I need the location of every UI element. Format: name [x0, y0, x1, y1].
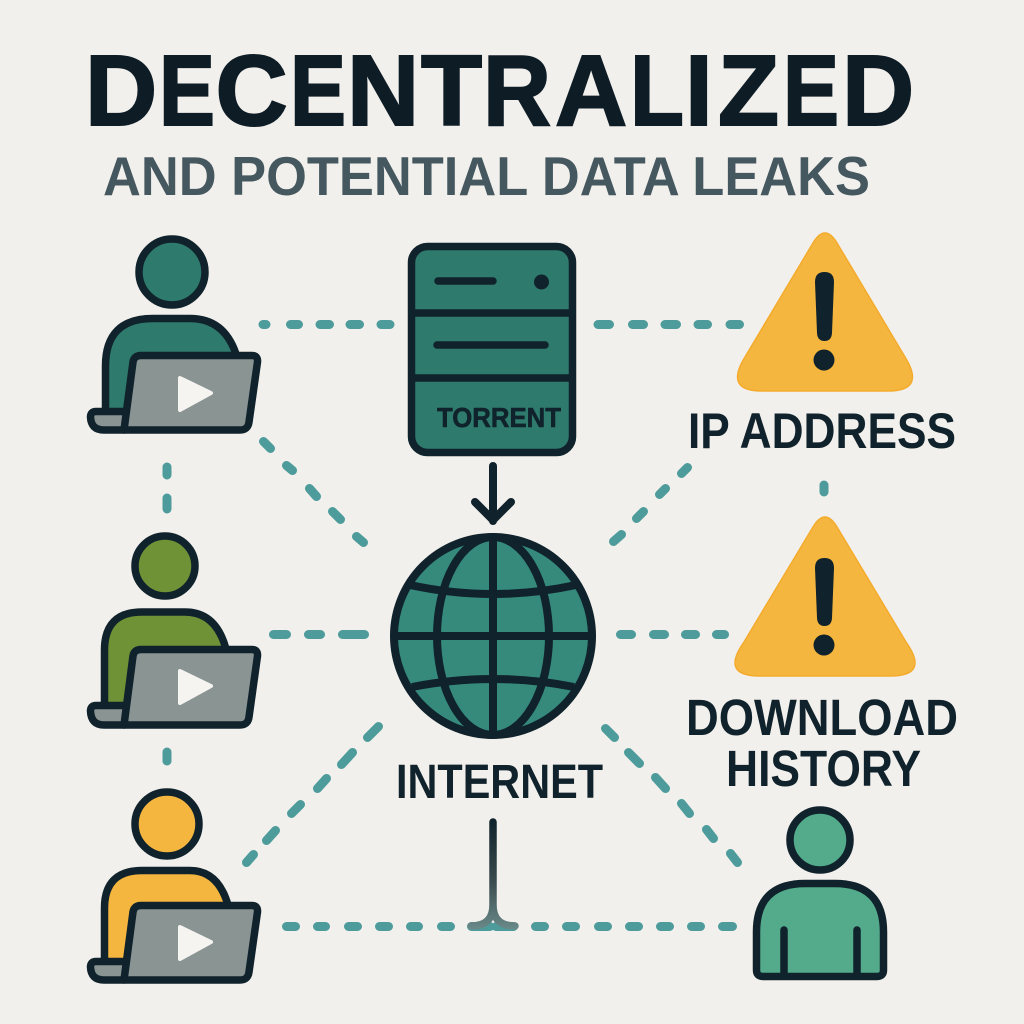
title: D — [842, 35, 914, 147]
icon: globe — [394, 537, 592, 735]
server label: TORRENT — [437, 402, 561, 433]
title: E — [159, 35, 215, 147]
title: Z — [718, 35, 779, 147]
title: L — [630, 35, 684, 147]
title: T — [421, 35, 482, 147]
title: A — [555, 35, 627, 147]
arrow: torrent to internet — [475, 466, 511, 521]
warning triangle: IP address — [738, 233, 912, 391]
connector stem joining bottom line — [471, 822, 515, 926]
label: internet: INTERNET — [396, 756, 603, 809]
warning triangle: download history — [735, 517, 915, 676]
title: R — [483, 35, 551, 147]
title: E — [783, 35, 839, 147]
server icon: torrent — [412, 246, 572, 452]
person: green — [756, 810, 884, 976]
label: download history: DOWNLOAD — [686, 689, 958, 746]
title: E — [290, 35, 346, 147]
label: IP address: IP ADDRESS — [688, 403, 956, 459]
person with laptop: teal — [90, 239, 258, 430]
dashed network connections — [167, 324, 824, 926]
label: download history — [686, 689, 958, 797]
label: download history: HISTORY — [726, 740, 921, 797]
title: I — [685, 35, 713, 147]
subtitle: AND POTENTIAL DATA LEAKS — [103, 145, 870, 207]
title: C — [216, 35, 288, 147]
title: D — [85, 35, 157, 147]
person with laptop: olive — [90, 536, 258, 725]
title: N — [347, 35, 419, 147]
person with laptop: yellow — [90, 792, 258, 980]
